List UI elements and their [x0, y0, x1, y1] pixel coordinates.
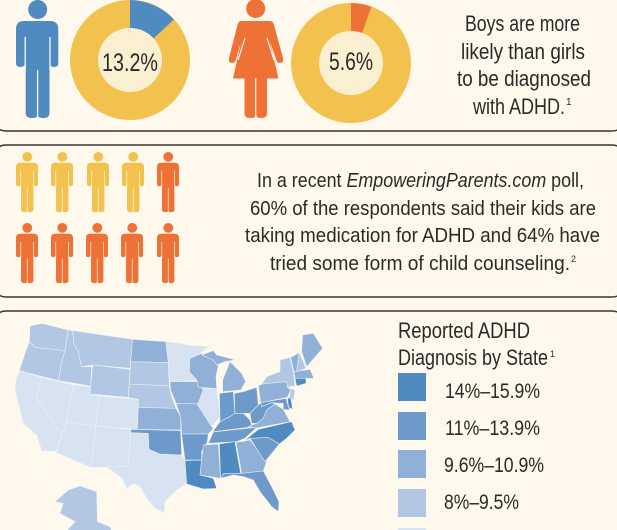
legend: 9.6%–10.9%: 9.6%–10.9% [444, 454, 544, 477]
text: poll result: In a recent EmpoweringParents.com poll, [257, 170, 584, 192]
text: poll result: taking medication for ADHD and 64% have [245, 225, 600, 247]
legend: 8%–9.5%: 8%–9.5% [444, 491, 519, 514]
legend: 14%–15.9% [398, 373, 540, 403]
text: boys more likely: 1 [566, 97, 572, 108]
map: US states choropleth [15, 323, 323, 530]
text: poll result: tried some form of child counseling. [270, 253, 570, 275]
legend: heading [398, 318, 555, 370]
legend: 11%–13.9% [398, 412, 540, 440]
icon: girl figure [229, 0, 283, 118]
legend: heading: Reported ADHD [398, 318, 530, 343]
text: boys more likely: with ADHD. [472, 94, 565, 119]
text: poll result: 60% of the respondents said their kids are [250, 198, 596, 220]
donut chart: girls 5.6%: 5.6% [329, 48, 373, 76]
donut chart: girls 5.6% [291, 3, 411, 123]
legend: heading: 1 [550, 349, 555, 359]
legend: 11%–13.9%: 11%–13.9% [445, 417, 540, 440]
text: poll result: 2 [571, 254, 576, 264]
panel: state map [0, 311, 617, 530]
legend: 9.6%–10.9% [398, 450, 544, 478]
text: boys more likely: Boys are more [465, 11, 580, 36]
donut chart: boys 13.2%: 13.2% [102, 49, 158, 77]
panel: poll [0, 145, 617, 297]
icon group: ten people [16, 152, 179, 283]
icon: boy figure [16, 0, 58, 118]
text: boys more likely [457, 11, 591, 119]
legend: 14%–15.9%: 14%–15.9% [445, 380, 540, 403]
text: poll result [245, 170, 600, 275]
legend: heading: Diagnosis by State [398, 345, 548, 370]
panel: boys vs girls diagnosis [0, 0, 617, 131]
donut chart: boys 13.2% [70, 0, 190, 120]
legend: 8%–9.5% [398, 489, 519, 517]
text: boys more likely: likely than girls [461, 39, 585, 64]
text: boys more likely: to be diagnosed [457, 66, 591, 91]
legend: lowest band swatch [398, 528, 426, 530]
